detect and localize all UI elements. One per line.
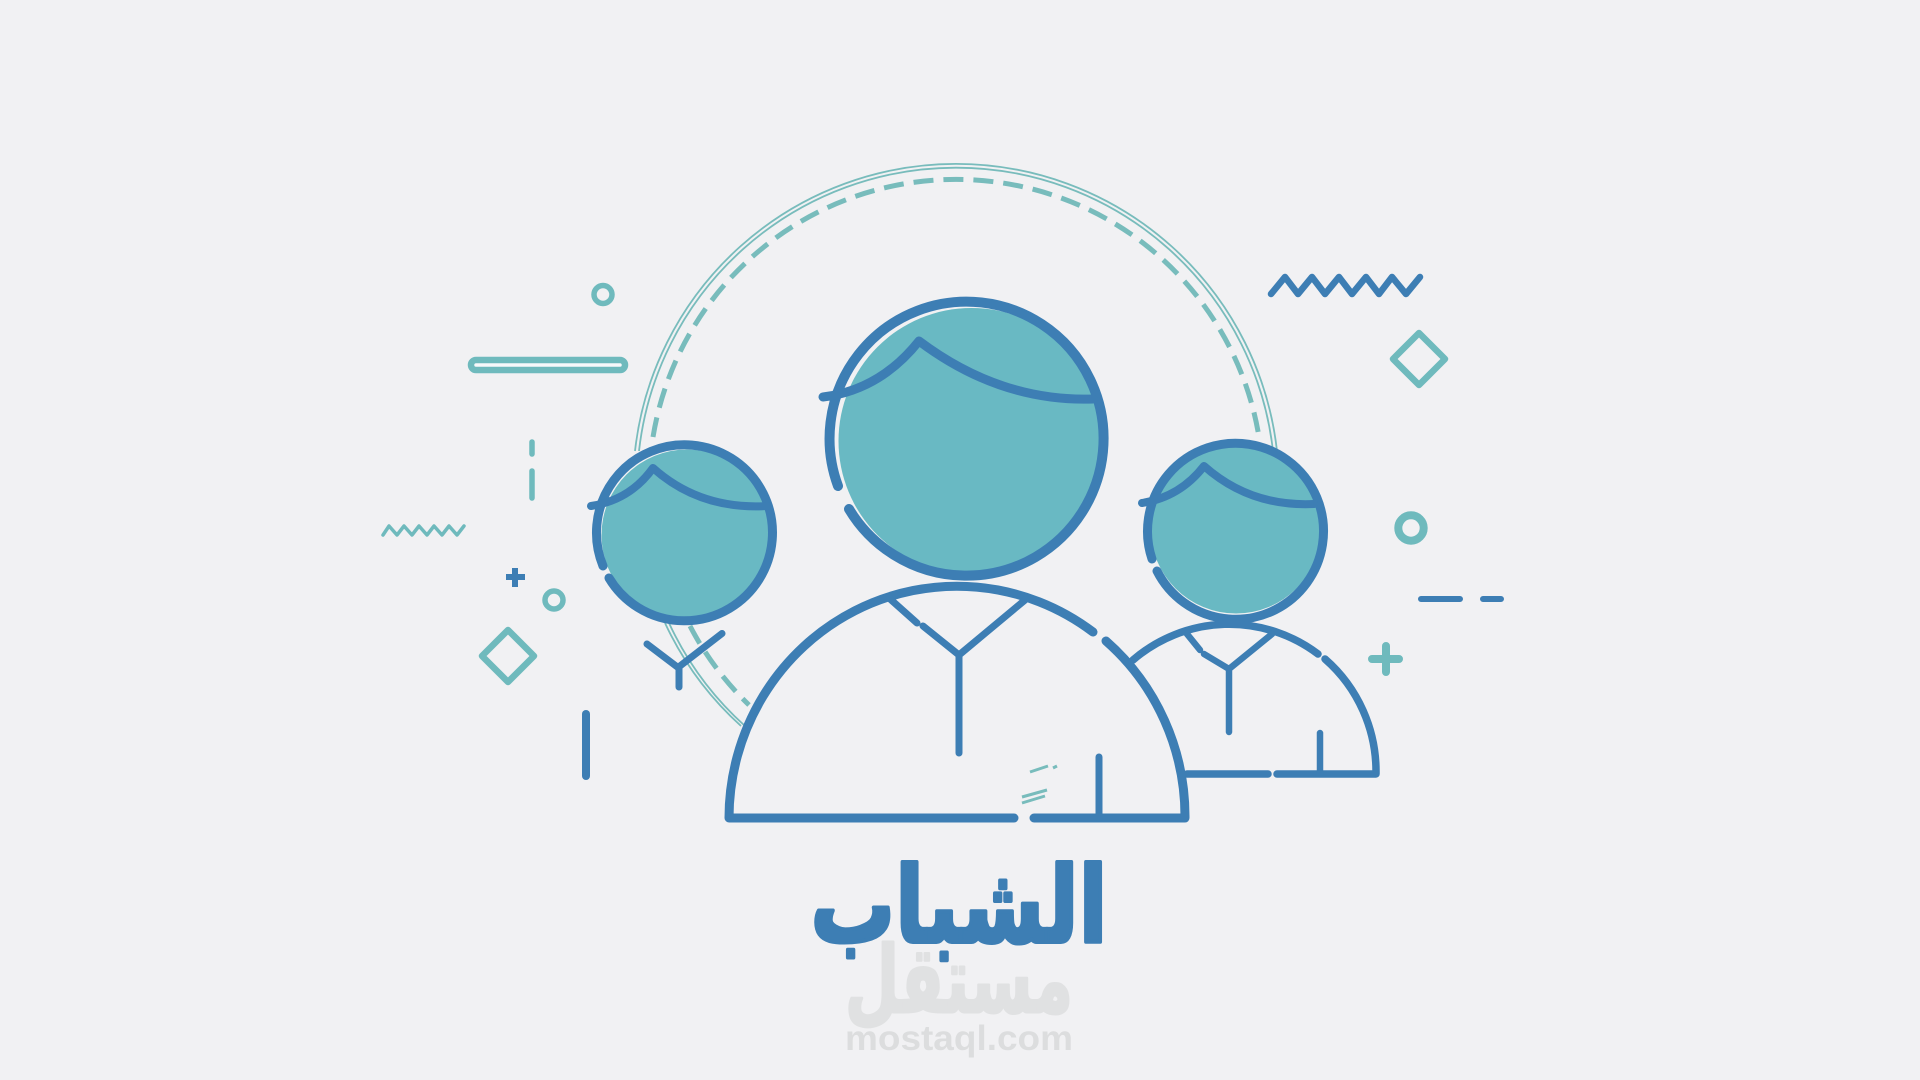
decoration: vertical teal dashes [529,442,535,498]
decoration: teal diamond right [1393,333,1445,385]
decoration: thin teal zigzag [383,526,464,535]
decoration: teal pill [471,360,625,370]
decoration: blue vertical bar [582,714,590,776]
title: الشباب [810,845,1108,967]
decoration: small teal ring left [545,591,563,609]
decoration: blue zigzag top right [1271,277,1420,294]
decoration: blue dashes right [1421,596,1501,602]
decoration: small blue plus [506,568,525,587]
icon: centre person [729,302,1185,818]
double ring and dashed circle behind the figures [635,164,1277,726]
icon: left person [591,445,772,687]
decoration: small teal ring top left [594,286,612,304]
icon: right person [1133,442,1376,774]
decoration: teal plus right [1372,646,1399,672]
decoration: teal ring right [1398,515,1424,541]
watermark: Arabic logotype: مستقل [845,927,1073,1034]
decoration: teal diamond left [482,630,534,682]
watermark: latin url: mostaql.com [845,1019,1073,1058]
